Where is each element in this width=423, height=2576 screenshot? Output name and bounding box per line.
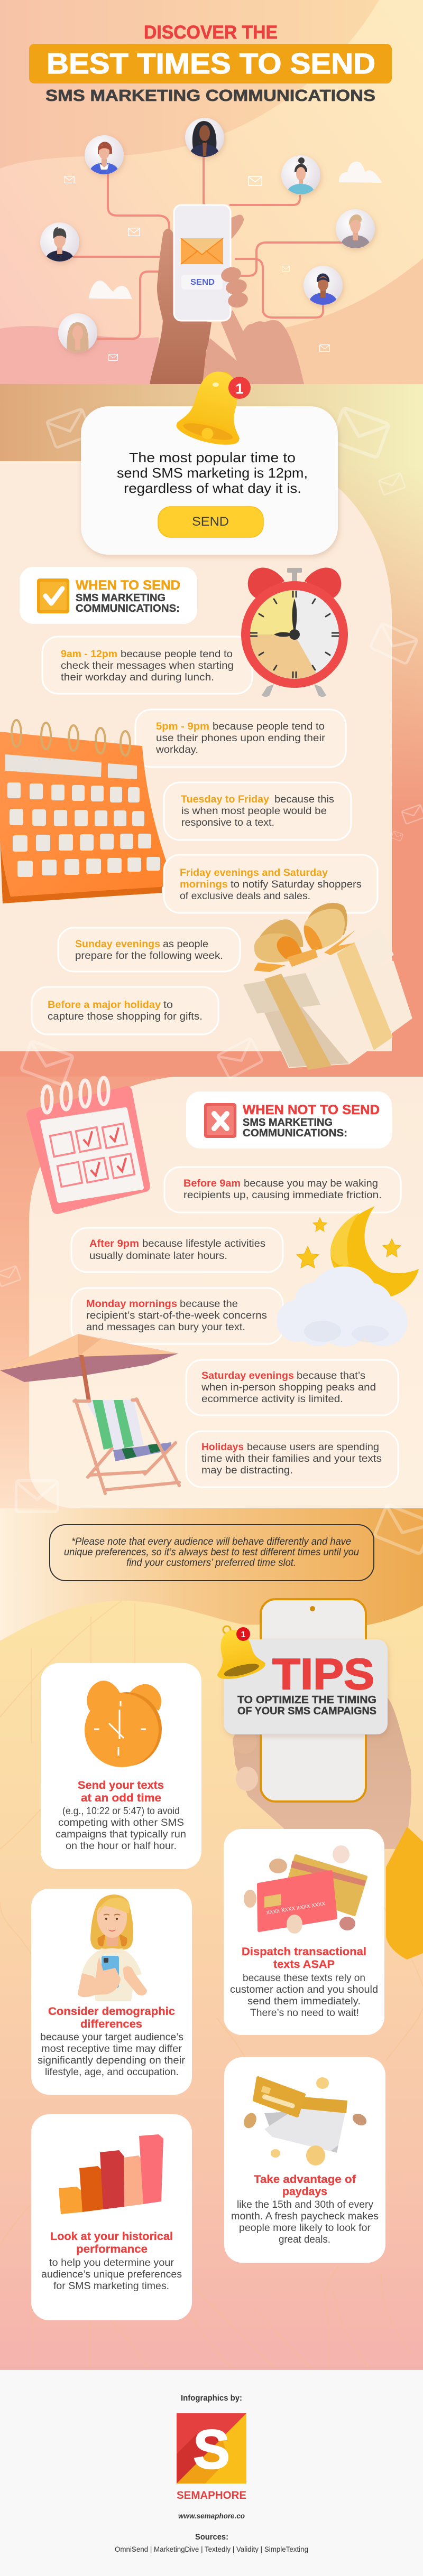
heading banner: BEST TIMES TO SEND xyxy=(47,47,375,80)
heading card: when to send: WHEN TO SEND xyxy=(76,578,180,593)
illustration: gift box xyxy=(244,903,411,1070)
note box xyxy=(50,1525,374,1581)
logo: semaphore: S xyxy=(193,2419,230,2480)
text box: 5pm - 9pm: workday. xyxy=(155,744,198,755)
heading card: when not to send: WHEN NOT TO SEND xyxy=(243,1103,380,1117)
tip card: historical performance: to help you determine your xyxy=(49,2257,174,2269)
tip card: historical performance: audience’s unique preferences xyxy=(41,2269,182,2280)
text box: 9am - 12pm: check their messages when starting xyxy=(61,660,234,671)
panel: note section background xyxy=(0,1508,423,1667)
illustration: hand holding phone xyxy=(150,205,304,384)
icon: credit cards and coins: XXXX XXXX XXXX XXXX xyxy=(266,1901,326,1916)
tip card: dispatch transactional texts: There’s no need to wait! xyxy=(250,2008,359,2019)
avatar: blonde man xyxy=(336,209,375,256)
tip card: historical performance: performance xyxy=(76,2243,148,2255)
tip card: paydays: people more likely to look for xyxy=(239,2223,371,2234)
fingers xyxy=(220,265,249,310)
text box: After 9pm: usually dominate later hours. xyxy=(89,1250,227,1262)
phone xyxy=(102,1956,119,1988)
panel: most popular time section background xyxy=(0,384,423,1077)
icon: small envelopes xyxy=(65,176,329,360)
sources heading: Sources: xyxy=(195,2533,228,2542)
thumb behind phone xyxy=(230,214,244,240)
heading card: when to send: SMS MARKETING xyxy=(76,592,165,604)
avatar: woman hair bun xyxy=(281,155,320,200)
note box: *Please note that every audience will behave differently and have xyxy=(71,1536,351,1547)
avatar: man dark hair xyxy=(40,222,79,267)
send button xyxy=(158,507,263,537)
tip card: demographic differences: significantly depending on their xyxy=(38,2055,186,2066)
text box: Tuesday to Friday: because this xyxy=(274,794,334,805)
text box: 9am - 12pm: because people tend to xyxy=(121,649,233,660)
heading card: when not to send xyxy=(186,1091,392,1149)
tip card: historical performance: Look at your historical xyxy=(50,2230,173,2243)
icon: calendar and card with coins xyxy=(242,2077,369,2166)
text box: After 9pm: After 9pm xyxy=(89,1238,139,1249)
subheading: SMS MARKETING COMMUNICATIONS xyxy=(45,86,375,105)
tip card: paydays: paydays xyxy=(282,2186,327,2198)
text box: Holidays xyxy=(186,1431,398,1487)
tip card: odd time: (e.g., 10:22 or 5:47) to avoid xyxy=(62,1806,180,1817)
text box: Before 9am: recipients up, causing immediate friction. xyxy=(183,1190,382,1201)
heading card: when not to send: SMS MARKETING xyxy=(243,1117,333,1128)
tip card: dispatch transactional texts: Dispatch transactional xyxy=(242,1946,366,1958)
icon: checkbox xyxy=(37,578,69,613)
text box: Saturday evenings xyxy=(186,1360,398,1415)
brown palm xyxy=(150,228,212,384)
title xyxy=(29,22,392,105)
tips heading card: OF YOUR SMS CAMPAIGNS xyxy=(237,1705,376,1717)
heading card: when to send: COMMUNICATIONS: xyxy=(76,603,180,614)
tip card: paydays: great deals. xyxy=(279,2234,330,2245)
text box: Before 9am: Before 9am xyxy=(183,1178,241,1189)
avatar: woman long black hair xyxy=(185,118,224,165)
text box: Before 9am xyxy=(164,1167,401,1212)
callout card: most popular time xyxy=(81,365,338,555)
tip card: historical performance: for SMS marketing times. xyxy=(53,2281,169,2292)
phone xyxy=(174,205,231,321)
tip card: historical performance xyxy=(31,2114,192,2320)
credit label: Infographics by: xyxy=(181,2394,242,2403)
icon: woman with phone xyxy=(78,1894,147,2001)
illustration: crescent moon with stars and cloud xyxy=(277,1206,419,1347)
text box: Holidays: time with their families and your texts xyxy=(201,1453,382,1464)
tip card: demographic differences: because your target audience’s xyxy=(40,2032,183,2043)
heading card: when to send xyxy=(20,567,197,624)
text box: Monday mornings: Monday mornings xyxy=(86,1299,177,1310)
callout text: send SMS marketing is 12pm, xyxy=(117,465,308,481)
callout text xyxy=(117,450,308,496)
text box: Saturday evenings: Saturday evenings xyxy=(201,1370,294,1382)
text box: 5pm - 9pm: because people tend to xyxy=(213,721,325,732)
text box: Sunday evenings xyxy=(58,928,240,972)
icon: yellow bell xyxy=(174,365,254,450)
text box: 9am - 12pm: their workday and during lunch. xyxy=(61,672,214,683)
text box: Monday mornings: recipient’s start-of-the-week concerns xyxy=(86,1310,267,1321)
tip card: paydays: like the 15th and 30th of every xyxy=(237,2199,374,2210)
text box: Sunday evenings: Sunday evenings xyxy=(75,939,160,950)
bar chart: 3D bars xyxy=(59,2134,163,2214)
avatar: dark-skinned man xyxy=(304,266,343,312)
text box: Friday evenings and Saturday mornings xyxy=(164,855,378,913)
text box: Tuesday to Friday xyxy=(164,782,351,840)
text box: Tuesday to Friday: Tuesday to Friday xyxy=(181,794,269,805)
text box: 9am - 12pm: 9am - 12pm xyxy=(61,649,117,660)
illustration: beach umbrella and chair xyxy=(0,1334,179,1494)
text box: 5pm - 9pm: 5pm - 9pm xyxy=(156,721,209,732)
icon: clouds xyxy=(89,162,382,299)
text box: Before 9am: because you may be waking xyxy=(244,1178,378,1189)
note box: find your customers’ preferred time slot. xyxy=(126,1557,296,1569)
icon: bell on tips card xyxy=(207,1624,268,1683)
text box: Friday evenings and Saturday mornings: Friday evenings and Saturday xyxy=(180,867,328,879)
icon: faint envelopes lower xyxy=(0,1038,263,1286)
text box: Friday evenings and Saturday mornings: mornings xyxy=(180,879,228,890)
hair xyxy=(90,1894,133,1949)
text box: Friday evenings and Saturday mornings: of exclusive deals and sales. xyxy=(180,891,310,902)
tip card: odd time: campaigns that typically run xyxy=(56,1829,186,1840)
icon: bell on tips card: 1 xyxy=(241,1630,246,1639)
tip card: odd time xyxy=(41,1663,201,1869)
tip card: paydays: Take advantage of xyxy=(254,2173,356,2186)
tips heading card: TO OPTIMIZE THE TIMING xyxy=(237,1694,376,1706)
tip card: odd time: Send your texts xyxy=(78,1779,164,1791)
logo: semaphore: SEMAPHORE xyxy=(177,2489,246,2502)
icon: x box xyxy=(204,1103,236,1138)
tip card: paydays: month. A fresh paycheck makes xyxy=(231,2211,379,2222)
text box: Before a major holiday: Before a major holiday xyxy=(48,1000,161,1011)
heading card: when not to send: COMMUNICATIONS: xyxy=(243,1127,347,1139)
text box: Saturday evenings: ecommerce activity is limited. xyxy=(201,1394,343,1405)
panel: hero background xyxy=(0,0,423,384)
tip card: dispatch transactional texts xyxy=(224,1829,384,2035)
note box: unique preferences, so it’s always best to test different times until you xyxy=(64,1547,359,1558)
phone xyxy=(261,1599,366,1802)
sleeve xyxy=(386,1827,423,1959)
notification badge xyxy=(228,377,251,399)
tip card: paydays xyxy=(224,2057,385,2263)
text box: Holidays: Holidays xyxy=(201,1442,244,1453)
tip card: dispatch transactional texts: because these texts rely on xyxy=(243,1973,365,1984)
text box: 9am - 12pm xyxy=(42,637,252,694)
icon: orange alarm clock xyxy=(85,1681,162,1767)
text box: Saturday evenings: because that’s xyxy=(297,1370,365,1382)
icon: credit cards and coins xyxy=(244,1845,366,1934)
text box: Sunday evenings: as people xyxy=(163,939,208,950)
send button: SEND xyxy=(192,515,229,529)
tip card: demographic differences: lifestyle, age, and occupation. xyxy=(45,2067,179,2078)
neck and face xyxy=(106,1934,118,1946)
text box: Sunday evenings: prepare for the following week. xyxy=(75,950,223,962)
illustration: pink checklist calendar xyxy=(32,1078,145,1209)
notification badge: 1 xyxy=(235,380,244,397)
footer panel xyxy=(0,2370,423,2576)
shirt xyxy=(82,1948,142,2001)
arms and hands xyxy=(78,1957,121,1997)
text box: Friday evenings and Saturday mornings: to notify Saturday shoppers xyxy=(231,879,362,890)
tip card: demographic differences: differences xyxy=(80,2018,142,2030)
text box: Monday mornings: and messages can bury your text. xyxy=(86,1322,245,1333)
bow xyxy=(254,903,356,972)
text box: Saturday evenings: when in-person shopping peaks and xyxy=(201,1382,376,1393)
tip card: dispatch transactional texts: customer action and you should xyxy=(230,1984,378,1995)
text box: Monday mornings xyxy=(71,1288,283,1344)
text box: Monday mornings: because the xyxy=(180,1299,238,1310)
send button xyxy=(181,275,223,290)
network connector lines xyxy=(73,156,344,339)
tip card: odd time: at an odd time xyxy=(81,1792,161,1804)
tips heading card xyxy=(224,1639,388,1734)
heading: TIPS: TIPS xyxy=(272,1649,374,1698)
text box: 5pm - 9pm xyxy=(135,710,346,767)
panel: tips section background xyxy=(0,1601,423,2370)
tip card: odd time: on the hour or half hour. xyxy=(66,1841,177,1852)
text box: Tuesday to Friday: is when most people would be xyxy=(181,806,327,817)
text box: Before a major holiday: capture those shopping for gifts. xyxy=(48,1011,203,1022)
text box: Holidays: because users are spending xyxy=(247,1442,379,1453)
avatar: woman short brown hair xyxy=(85,135,124,181)
text box: Before a major holiday xyxy=(32,987,218,1034)
text box: Tuesday to Friday: responsive to a text. xyxy=(181,817,274,828)
tip card: dispatch transactional texts: send them immediately. xyxy=(247,1996,361,2007)
illustration: orange spiral calendar xyxy=(0,720,176,903)
sources list: OmniSend | MarketingDive | Textedly | Validity | SimpleTexting xyxy=(115,2545,308,2553)
deck chair xyxy=(74,1399,179,1494)
tip card: demographic differences: Consider demographic xyxy=(48,2005,175,2018)
panel: when not to send section background xyxy=(0,1051,423,1508)
callout text: regardless of what day it is. xyxy=(124,480,301,496)
text box: After 9pm: because lifestyle activities xyxy=(142,1238,265,1249)
text box: Before a major holiday: to xyxy=(163,1000,173,1011)
text box: 5pm - 9pm: use their phones upon ending their xyxy=(156,733,326,744)
logo: semaphore xyxy=(177,2413,246,2502)
hand xyxy=(233,1691,411,1849)
heading: discover the: DISCOVER THE xyxy=(144,22,278,43)
fingers xyxy=(233,1730,258,1791)
website: www.semaphore.co xyxy=(178,2512,245,2520)
icon: faint envelopes around note xyxy=(16,1481,423,1554)
callout text: The most popular time to xyxy=(129,450,296,465)
tip card: demographic differences: most receptive time may differ xyxy=(41,2043,182,2055)
icon: faint background envelopes xyxy=(47,408,423,841)
pointing hand xyxy=(203,310,304,384)
tip card: demographic differences xyxy=(31,1889,192,2095)
illustration: red alarm clock xyxy=(241,567,348,697)
illustration: hand holding phone for tips xyxy=(233,1599,423,1959)
text box: After 9pm xyxy=(71,1228,283,1272)
text box: Holidays: may be distracting. xyxy=(201,1465,293,1476)
tip card: dispatch transactional texts: texts ASAP xyxy=(273,1958,335,1971)
avatar: woman long blonde hair xyxy=(58,313,97,354)
tip card: odd time: competing with other SMS xyxy=(58,1817,184,1828)
send button: SEND xyxy=(190,278,215,287)
icon: envelope xyxy=(181,238,223,264)
